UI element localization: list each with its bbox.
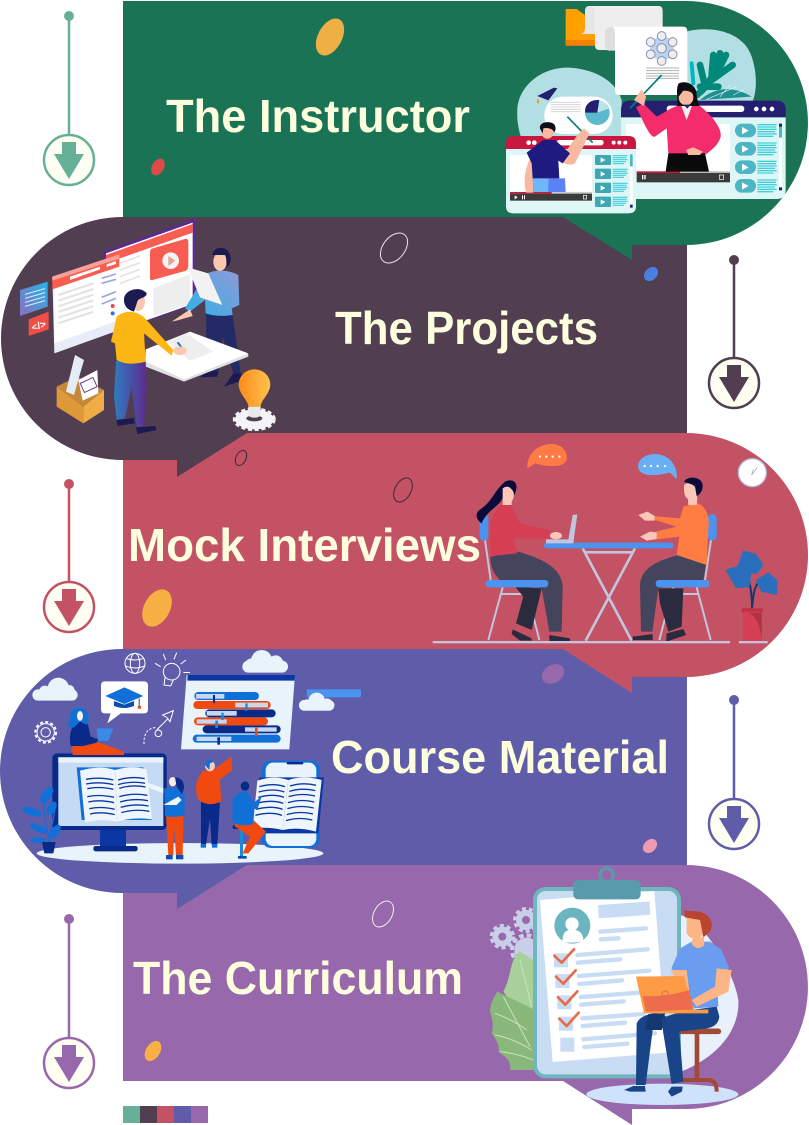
open book by phone: [253, 777, 324, 833]
potted plant: [727, 552, 776, 641]
cardboard box with papers: [57, 355, 104, 423]
seated man on stool: [232, 781, 266, 859]
icon: blue speech bubble: [638, 454, 677, 479]
icon: light bulb on gear: [234, 369, 274, 430]
standing woman: [145, 777, 185, 859]
panel: Mock Interviews band: [123, 433, 808, 693]
back web panel: [103, 218, 195, 336]
checklist sheet: [540, 891, 667, 1062]
leaves: [692, 53, 752, 100]
heading: Course Material: Course Material: [331, 731, 669, 783]
illustration: curriculum checklist and man with laptop: [490, 868, 738, 1105]
potted plant: [21, 785, 63, 853]
ground ellipse: [37, 843, 323, 864]
front web panel: [52, 254, 119, 353]
icon: dashed paper plane arrow: [144, 711, 173, 744]
panel: The Curriculum band: [123, 865, 808, 1125]
woman sitting on monitor with laptop: [68, 707, 124, 755]
clouds: [32, 650, 334, 711]
leaves: [490, 952, 535, 1070]
icon: light bulb outline: [155, 653, 190, 686]
heading: The Instructor: The Instructor: [166, 90, 470, 142]
icon: globe: [125, 653, 145, 673]
desktop monitor with open book: [52, 753, 167, 851]
pie chart card and graduation cap: [537, 88, 613, 134]
illustration: instructor teaching online: [506, 6, 786, 213]
man in blue sweater: [172, 248, 242, 387]
icon: orange speech bubble: [527, 444, 567, 468]
colour palette swatches: [123, 1106, 208, 1123]
back document sheet: [582, 6, 663, 50]
panel: The Projects band: [1, 217, 687, 477]
icon: wall clock: [738, 459, 766, 487]
pale background blobs: [517, 29, 756, 140]
arrow: Mock Interviews timeline: [44, 479, 94, 632]
clipboard clip: [573, 868, 641, 899]
arrow: Instructor timeline: [44, 11, 94, 185]
heading: The Projects: The Projects: [335, 302, 598, 354]
man in chair: [633, 478, 717, 641]
floating book list window: [181, 675, 295, 749]
panel: The Instructor band: [123, 1, 808, 260]
clipboard board: [535, 889, 679, 1076]
table: [544, 543, 673, 641]
gears: [491, 909, 541, 965]
pale backdrop blob: [677, 915, 738, 1073]
icon: gear: [35, 722, 56, 743]
woman in chair with laptop: [477, 480, 577, 641]
arrow: Projects timeline: [709, 255, 759, 408]
man in yellow sweater: [111, 289, 187, 434]
woman instructor with pointer: [630, 75, 721, 172]
decorative ovals on the bands: [136, 14, 661, 1064]
left video window: [506, 136, 636, 213]
arrow: Curriculum timeline: [44, 914, 94, 1088]
arrow: Course Material timeline: [709, 695, 759, 849]
right video window: [621, 101, 786, 199]
stool: [677, 1031, 718, 1092]
panel: Course Material band: [0, 649, 687, 909]
illustration: team working on projects: [20, 218, 274, 434]
man instructor with pointer: [525, 117, 593, 193]
drawing table: [146, 332, 248, 382]
standing man in orange sweater: [196, 757, 232, 848]
speech bubble with graduation cap: [101, 681, 148, 723]
heading: The Curriculum: The Curriculum: [133, 952, 463, 1004]
front document sheet with diagram: [605, 27, 687, 95]
code cards: </>: [30, 319, 48, 334]
illustration: learners with course material: [21, 650, 361, 864]
ground ellipse: [586, 1084, 738, 1105]
blue label bar: [307, 689, 361, 697]
seated man with laptop: [624, 911, 732, 1097]
code cards: [20, 282, 49, 336]
cloud in front of label bar: [299, 693, 334, 711]
floor line: [433, 641, 768, 643]
illustration: mock interview at a table: [433, 444, 776, 643]
heading: Mock Interviews: Mock Interviews: [128, 519, 481, 571]
icon: orange folder: [566, 9, 596, 46]
phone: [262, 761, 320, 848]
